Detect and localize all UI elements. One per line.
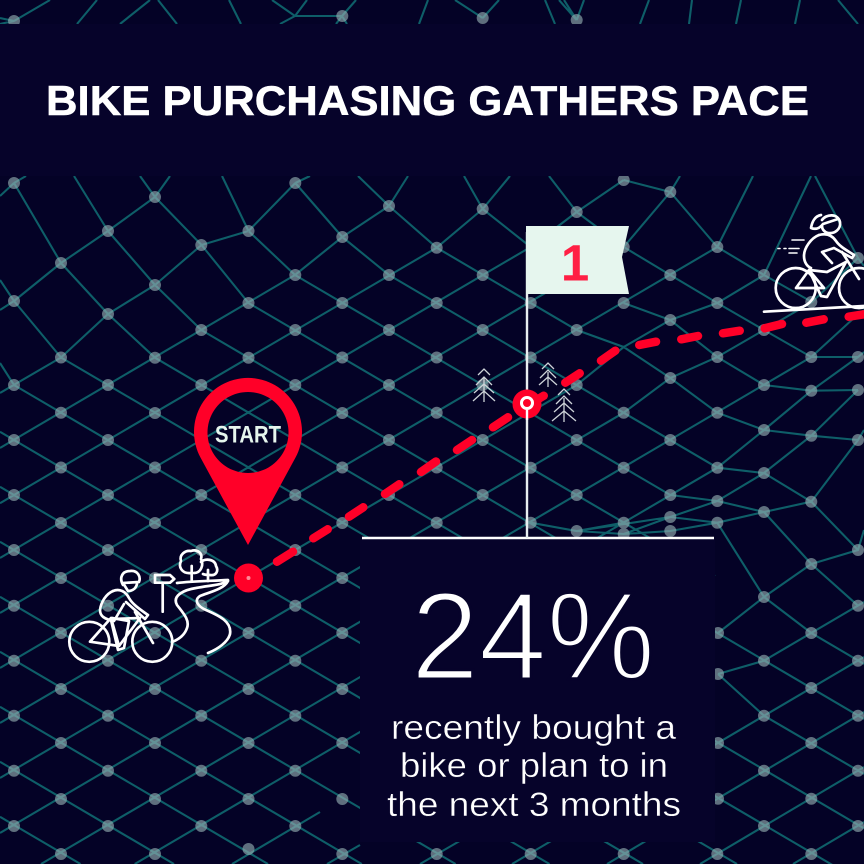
- start marker: [194, 378, 302, 545]
- dashed route: [277, 314, 864, 562]
- title: BIKE PURCHASING GATHERS PACE: [46, 77, 809, 124]
- stat description: bike or plan to in: [400, 747, 668, 785]
- stat description: recently bought a: [391, 709, 676, 747]
- title band: [0, 24, 864, 176]
- stat description: the next 3 months: [387, 786, 681, 824]
- stat description: [387, 709, 681, 824]
- milestone marker: [512, 390, 542, 420]
- icon: cyclist riding on path: [764, 215, 864, 312]
- panel: statistic: [360, 538, 715, 842]
- baseline rule: [362, 537, 714, 539]
- icon: pine trees: [473, 363, 576, 422]
- icon: cyclist with signpost and winding road: [69, 550, 230, 662]
- start label: START: [215, 422, 281, 448]
- flag number: 1: [561, 234, 589, 292]
- stat value: 24%: [411, 568, 655, 706]
- flag: [526, 226, 629, 538]
- start point: [234, 564, 263, 592]
